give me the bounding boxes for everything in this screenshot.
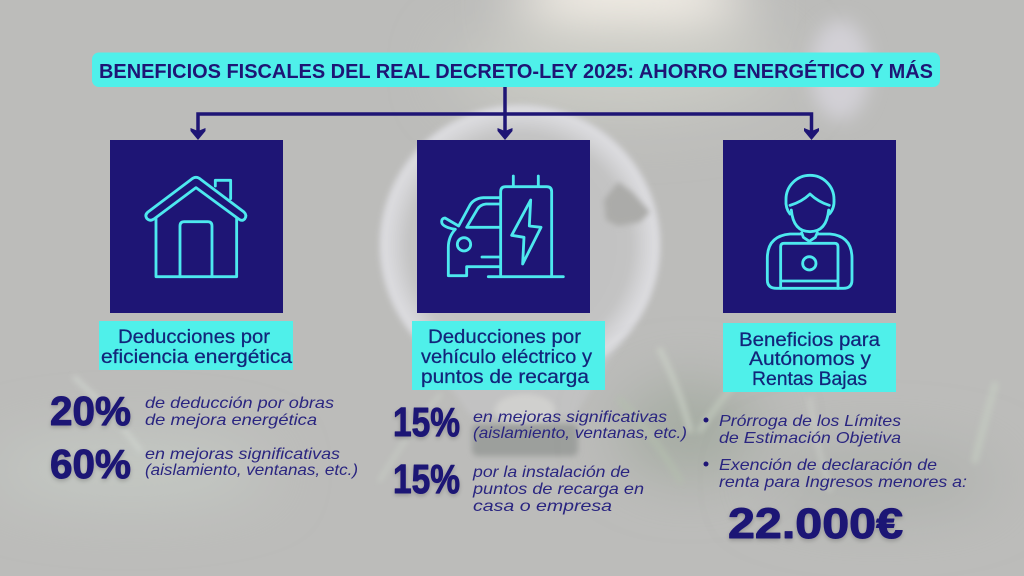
heading: benefits for self-employed: Rentas Bajas: [752, 368, 867, 390]
stat: 60 percent: en mejoras significativas: [145, 446, 340, 463]
stat: 20 percent: de mejora energética: [145, 412, 317, 429]
icon: house: [110, 140, 283, 313]
panel: electric vehicle: [393, 140, 687, 515]
stat: 15 percent charging points: puntos de recarga en: [472, 481, 644, 498]
panel: self-employed and low income: [704, 140, 967, 548]
heading: energy efficiency deductions: Deducciones por: [118, 326, 271, 348]
bullet: estimation limits: Prórroga de los Límites: [719, 413, 901, 430]
bullet: income declaration exemption: Exención de declaración de: [719, 457, 937, 474]
bullet: estimation limits: [704, 413, 901, 447]
title banner: [92, 52, 940, 87]
stat: 15 percent charging points: casa o empresa: [473, 498, 612, 515]
title banner: BENEFICIOS FISCALES DEL REAL DECRETO-LEY 2025: AHORRO ENERGÉTICO Y MÁS: [99, 60, 933, 83]
icon: electric car and charger: [417, 140, 590, 313]
stat: 15 percent charging points: 15%: [393, 456, 460, 502]
stat: 15 percent improvements: (aislamiento, ventanas, etc.): [473, 425, 687, 442]
stat: 15 percent charging points: por la instalación de: [472, 464, 630, 481]
stat: 20 percent: 20%: [50, 388, 131, 434]
stat: income threshold: 22.000€: [728, 500, 903, 548]
heading: benefits for self-employed: Autónomos y: [749, 348, 871, 370]
heading: electric vehicle and charging points: [412, 321, 605, 390]
bullet: estimation limits: de Estimación Objetiva: [719, 430, 901, 447]
stat: 20 percent: [50, 388, 334, 434]
stat: 60 percent: [50, 441, 358, 487]
bullet: income declaration exemption: [704, 457, 967, 491]
stat: 60 percent: 60%: [50, 441, 131, 487]
bullet: income declaration exemption: renta para Ingresos menores a:: [719, 474, 967, 491]
icon: person with laptop: [723, 140, 896, 313]
heading: electric vehicle and charging points: Deducciones por: [428, 326, 582, 348]
heading: electric vehicle and charging points: puntos de recarga: [421, 366, 589, 388]
heading: electric vehicle and charging points: vehículo eléctrico y: [421, 346, 592, 368]
stat: 15 percent improvements: 15%: [393, 399, 460, 445]
heading: energy efficiency deductions: eficiencia energética: [101, 346, 292, 368]
connector arrows from title to the three columns: [190, 87, 819, 140]
heading: benefits for self-employed: [723, 323, 896, 392]
stat: 20 percent: de deducción por obras: [145, 395, 334, 412]
heading: benefits for self-employed: Beneficios para: [739, 329, 880, 351]
heading: energy efficiency deductions: [99, 321, 293, 370]
stat: 60 percent: (aislamiento, ventanas, etc.): [145, 462, 358, 479]
stat: 15 percent improvements: en mejoras significativas: [473, 409, 667, 426]
stat: 15 percent charging points: [393, 456, 644, 515]
stat: 15 percent improvements: [393, 399, 687, 445]
panel: energy efficiency: [50, 140, 358, 487]
